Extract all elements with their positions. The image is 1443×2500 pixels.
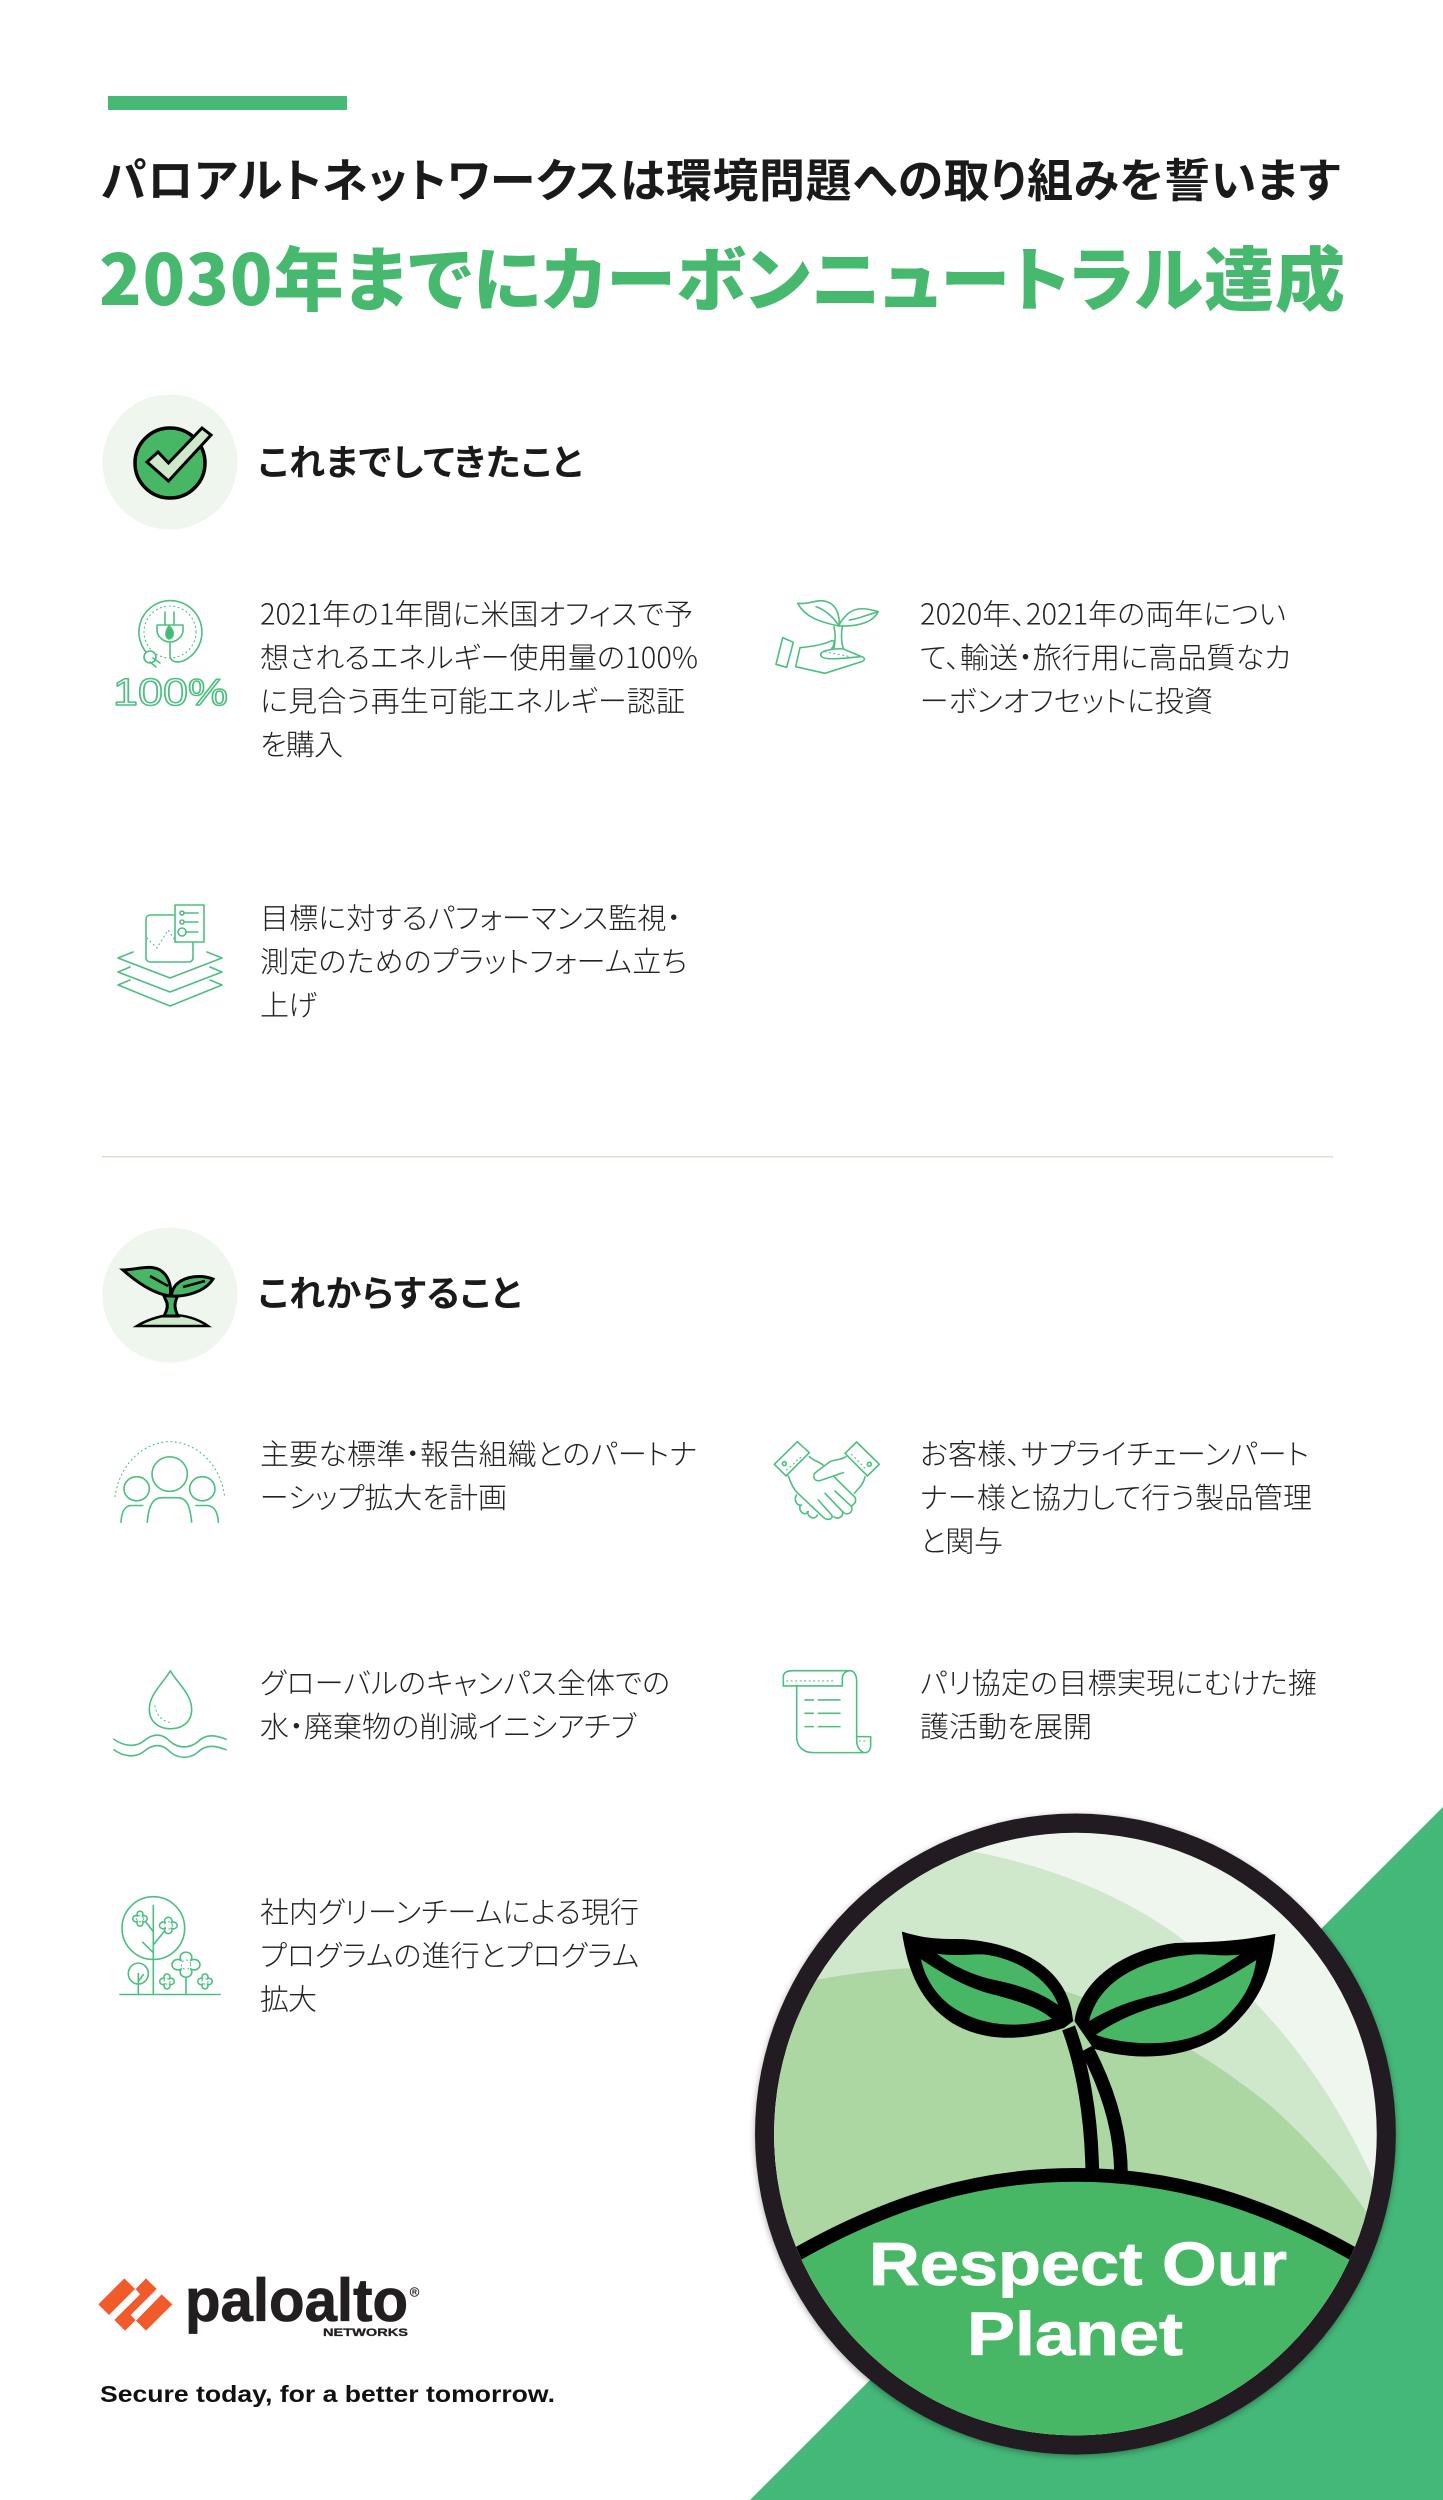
text: carbon offsets: て、輸送・旅行用に高品質なカ — [920, 635, 1291, 677]
badge: Respect Our Planet: Planet — [967, 2300, 1183, 2368]
icon: plug 100% — [113, 601, 228, 714]
icon: handshake — [774, 1442, 879, 1519]
text: monitoring platform: 目標に対するパフォーマンス監視・ — [260, 896, 681, 938]
text: green teams: プログラムの進行とプログラム — [260, 1933, 639, 1975]
text: green teams: 拡大 — [260, 1976, 317, 2018]
icon: plug 100%: 100% — [113, 672, 228, 714]
text: monitoring platform: 上げ — [260, 982, 317, 1024]
logo: Palo Alto Networks — [98, 2267, 419, 2339]
text: Paris agreement advocacy: 護活動を展開 — [920, 1704, 1092, 1746]
text: carbon offsets: 2020年、2021年の両年につい — [920, 592, 1286, 634]
text: renewable energy: を購入 — [260, 722, 343, 764]
text: product stewardship: ナー様と協力して行う製品管理 — [920, 1475, 1312, 1517]
text: standards partnerships — [260, 1432, 697, 1517]
section heading: done so far: これまでしてきたこと — [258, 434, 582, 486]
section heading: to do next: これからすること — [258, 1265, 521, 1317]
icon: hand holding plant — [776, 601, 878, 673]
icon: water drop — [114, 1671, 226, 1757]
tagline: Secure today, for a better tomorrow. — [100, 2381, 555, 2407]
title: パロアルトネットワークスは環境問題への取り組みを誓います — [101, 145, 1340, 211]
logo: Palo Alto Networks: R — [412, 2290, 417, 2296]
green triangle background — [750, 1807, 1443, 2500]
logo: Palo Alto Networks: paloalto — [185, 2267, 408, 2334]
icon: people — [115, 1442, 225, 1522]
headline: 2030年までにカーボンニュートラル達成 — [99, 225, 1345, 326]
text: water and waste: 水・廃棄物の削減イニシアチブ — [260, 1704, 637, 1746]
text: monitoring platform — [260, 896, 687, 1024]
text: water and waste: グローバルのキャンパス全体での — [260, 1660, 670, 1702]
text: Paris agreement advocacy — [920, 1660, 1317, 1746]
badge: Respect Our Planet — [730, 1814, 1396, 2469]
text: product stewardship — [920, 1432, 1312, 1560]
icon: trees — [120, 1897, 220, 1994]
divider — [102, 1156, 1333, 1158]
text: standards partnerships: ーシップ拡大を計画 — [260, 1475, 507, 1517]
text: product stewardship: と関与 — [920, 1518, 1003, 1560]
section icon: sprout — [102, 1228, 238, 1362]
text: monitoring platform: 測定のためのプラットフォーム立ち — [260, 939, 687, 981]
text: product stewardship: お客様、サプライチェーンパート — [920, 1432, 1309, 1474]
text: renewable energy: 2021年の1年間に米国オフィスで予 — [260, 592, 693, 634]
text: Paris agreement advocacy: パリ協定の目標実現にむけた擁 — [920, 1660, 1317, 1702]
text: renewable energy: 想されるエネルギー使用量の100% — [260, 635, 698, 677]
text: green teams: 社内グリーンチームによる現行 — [260, 1890, 639, 1932]
accent bar — [108, 96, 347, 110]
logo: Palo Alto Networks: NETWORKS — [323, 2327, 408, 2339]
icon: scroll — [783, 1671, 871, 1753]
badge: Respect Our Planet: Respect Our — [869, 2230, 1287, 2298]
icon: layers and report — [118, 905, 222, 1006]
text: standards partnerships: 主要な標準・報告組織とのパートナ — [260, 1432, 697, 1474]
section icon: check mark — [102, 394, 238, 530]
text: renewable energy: に見合う再生可能エネルギー認証 — [260, 678, 685, 720]
text: green teams — [260, 1890, 639, 2018]
text: renewable energy — [260, 592, 698, 764]
text: carbon offsets: ーボンオフセットに投資 — [920, 678, 1213, 720]
text: water and waste — [260, 1660, 670, 1746]
text: carbon offsets — [920, 592, 1291, 720]
